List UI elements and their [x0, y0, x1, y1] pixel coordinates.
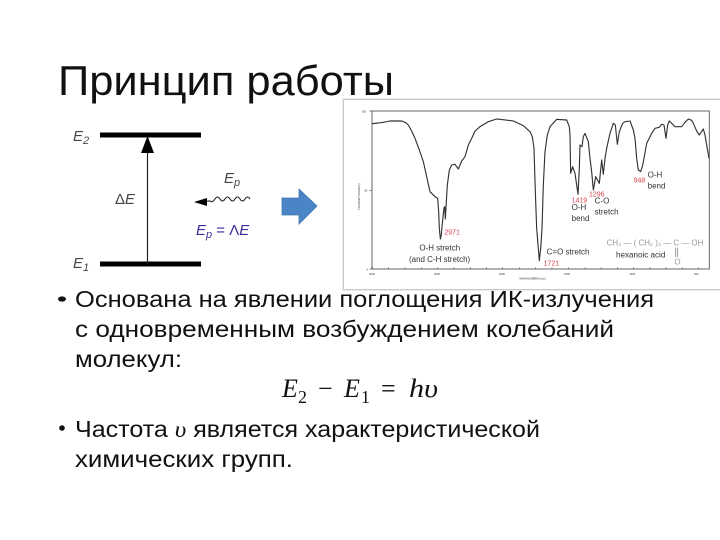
title: Принцип работы	[58, 57, 394, 104]
label delta E: ΔE	[115, 191, 136, 208]
label E2: E	[73, 128, 83, 145]
axes: WAVENUMBER(1/cm)	[519, 276, 546, 280]
hexanoic acid formula: CH₃ — ( CH₂ )₄ — C — OH	[607, 238, 704, 247]
spectrum frame	[343, 99, 720, 290]
chart: IR spectrum of hexanoic acid	[343, 99, 720, 290]
axes: 3000	[434, 272, 440, 276]
annotation: O-H stretch	[409, 243, 471, 264]
bullet 1 text: Основана на явлении поглощения ИК-излучения	[75, 286, 654, 312]
hexanoic acid formula: O	[674, 257, 681, 266]
bullet 1 text	[75, 286, 654, 372]
hexanoic acid formula: hexanoic acid	[616, 251, 665, 260]
equation: hυ	[409, 374, 438, 403]
axes: 50	[364, 189, 368, 193]
bullet 2 text: Частота υ является характеристической	[75, 416, 540, 442]
text block: bullet list	[58, 286, 654, 472]
annotation: C-O stretch	[595, 196, 619, 217]
equation: E	[281, 374, 298, 403]
label Ep = delta E: = Λ	[212, 222, 239, 239]
panel: energy level diagram	[73, 128, 250, 274]
spectrum curve	[372, 119, 709, 261]
axes: TRANSMITTANCE(%)	[357, 183, 361, 210]
equation: 1	[361, 387, 370, 407]
peak label 1419: 1419	[572, 197, 587, 204]
annotation: O-H bend 948: O-H	[648, 170, 663, 179]
equation: E	[343, 374, 360, 403]
axes: 4000	[369, 272, 375, 276]
annotation: C=O stretch: C=O stretch	[547, 247, 589, 256]
axes: 1500	[564, 272, 570, 276]
label E1: 1	[83, 262, 89, 274]
annotation: O-H stretch: (and C-H stretch)	[409, 255, 471, 264]
axes	[357, 109, 709, 280]
axes: 1000	[629, 272, 636, 276]
axes: 2000	[499, 272, 505, 276]
axes: 0	[367, 267, 369, 271]
annotation: O-H bend: O-H	[572, 203, 587, 212]
peak label 948: 948	[634, 178, 645, 185]
bullet 2	[59, 425, 65, 431]
annotation: O-H bend: bend	[572, 214, 589, 223]
energy level E2	[100, 132, 201, 138]
annotation: C-O stretch: C-O	[595, 196, 609, 205]
annotation: O-H bend	[572, 203, 589, 223]
peak label 2971: 2971	[444, 230, 460, 237]
label Ep: E	[224, 170, 234, 187]
bullet 2 text	[75, 416, 540, 472]
label Ep: p	[233, 177, 240, 189]
bullet 1	[58, 296, 66, 302]
annotation: C-O stretch: stretch	[595, 208, 619, 217]
bullet 2 text: химических групп.	[75, 446, 293, 472]
peak label 1296: 1296	[589, 191, 605, 198]
label Ep = delta E: E	[239, 222, 249, 239]
energy level E1	[100, 262, 201, 266]
arrow: incoming photon	[194, 197, 250, 206]
peak label 1721: 1721	[544, 260, 559, 267]
equation	[281, 374, 438, 407]
label Ep = delta E: E	[196, 222, 206, 239]
annotation: O-H bend 948: bend	[648, 182, 665, 191]
equation: 2	[298, 387, 307, 407]
label E1: E	[73, 255, 83, 272]
label Ep = delta E: p	[205, 229, 212, 241]
icon: block arrow	[282, 189, 317, 224]
bullet 1 text: с одновременным возбуждением колебаний	[75, 316, 614, 342]
equation: −	[318, 374, 333, 403]
bullet 1 text: молекул:	[75, 346, 182, 372]
axes: 100	[362, 109, 367, 113]
annotation: O-H bend 948	[648, 170, 665, 191]
annotation: O-H stretch: O-H stretch	[419, 243, 460, 252]
equation: =	[381, 374, 396, 403]
arrow: delta E transition	[141, 136, 154, 264]
label E2: 2	[82, 135, 89, 147]
axes: 500	[694, 272, 699, 276]
hexanoic acid formula	[607, 238, 704, 266]
